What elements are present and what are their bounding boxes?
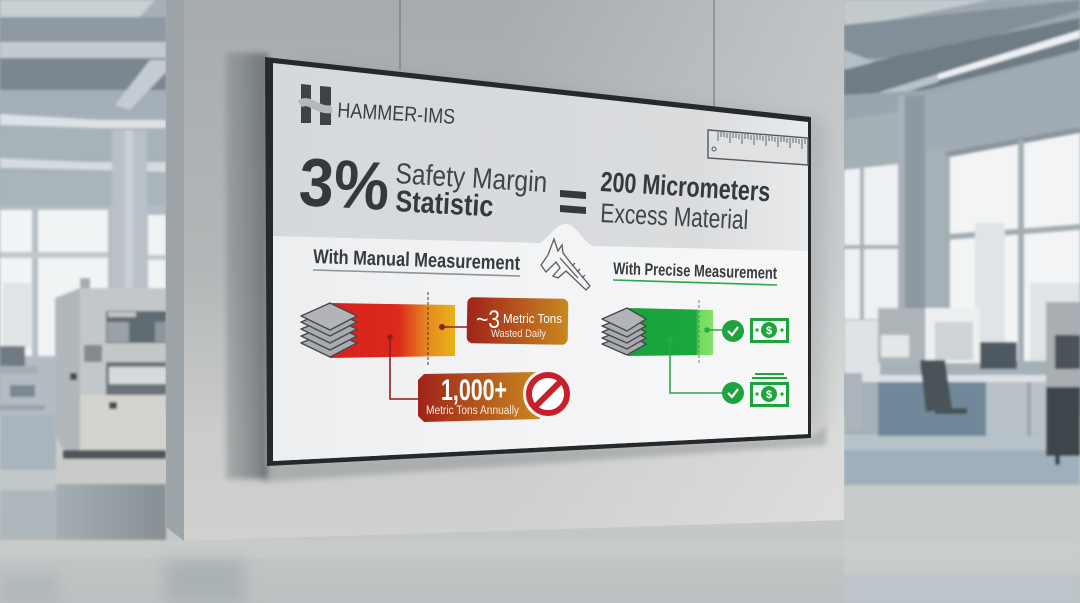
manual: red material bar — [330, 292, 455, 367]
icon: check bottom — [722, 382, 744, 404]
icon: money top: $ — [766, 325, 772, 337]
heading: with manual measurement: With Manual Measurement — [313, 246, 521, 275]
concrete wall — [166, 0, 844, 541]
board screen — [273, 63, 808, 461]
connector: annual waste — [388, 335, 420, 399]
callout: 3 metric tons daily: ~3 — [476, 306, 500, 334]
callout: 1,000+ metric tons annually: 1,000+ — [441, 374, 507, 407]
headline left: 3% statistic: 3% — [297, 144, 391, 225]
caliper icon — [541, 239, 590, 290]
equals sign — [560, 190, 586, 214]
right machine — [1046, 302, 1080, 387]
heading: with precise measurement: With Precise Measurement — [613, 259, 778, 283]
left floor — [0, 415, 56, 540]
headline left: 3% statistic: Statistic — [395, 185, 494, 223]
left machine — [80, 278, 90, 290]
precise: sheet stack icon — [602, 308, 646, 355]
green connectors — [668, 328, 724, 393]
precise: green material bar — [628, 300, 713, 364]
right floor — [844, 436, 1046, 450]
headline left: 3% statistic — [297, 144, 548, 225]
logo: HAMMER-IMS — [337, 99, 456, 129]
headline right: 200 micrometers: 200 Micrometers — [600, 166, 771, 207]
manual: sheet stack icon — [301, 303, 357, 357]
headline right: 200 micrometers: Excess Material — [600, 198, 749, 235]
icon: money top — [750, 318, 789, 343]
board frame — [265, 57, 811, 466]
left interior — [0, 0, 155, 17]
callout: 3 metric tons daily: Metric Tons — [503, 312, 562, 326]
logo — [300, 84, 456, 129]
callout: 1,000+ metric tons annually: Metric Tons Annually — [426, 405, 519, 417]
icon: money stack — [750, 373, 789, 407]
right interior — [844, 0, 1080, 120]
headline left: 3% statistic: Safety Margin — [395, 158, 548, 199]
lower light panel — [273, 224, 808, 461]
connector: daily waste — [440, 324, 468, 330]
icon: check top — [722, 320, 744, 342]
callout: 3 metric tons daily: Wasted Daily — [491, 328, 546, 340]
display board — [265, 57, 811, 466]
icon: prohibition sign — [523, 369, 573, 419]
front floor — [0, 540, 1080, 558]
hanging cables — [400, 0, 714, 106]
ruler icon — [708, 130, 808, 165]
callout: 3 metric tons daily — [467, 297, 568, 345]
icon: money stack: $ — [766, 389, 772, 401]
callout: 1,000+ metric tons annually — [418, 372, 540, 422]
headline right: 200 micrometers — [600, 166, 771, 235]
